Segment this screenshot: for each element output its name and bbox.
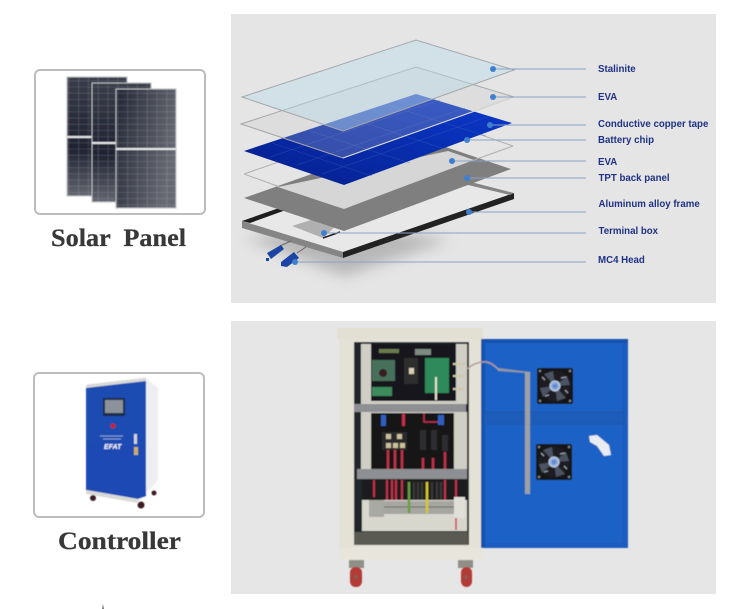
heading: Controller: Controller <box>58 528 181 555</box>
icon: cooling fan upper <box>537 368 573 404</box>
cabinet body <box>337 328 628 587</box>
icon: controller cabinet <box>86 378 158 508</box>
icon: controller cabinet: EFAT <box>104 444 122 451</box>
layer labels: EVA <box>598 157 617 168</box>
metal rail upper <box>354 404 466 412</box>
layer labels: EVA <box>598 92 617 103</box>
upper circuit plate <box>371 344 465 401</box>
door <box>481 339 628 548</box>
layer: EVA lower <box>244 131 513 209</box>
layer labels: Battery chip <box>598 135 654 146</box>
cabinet interior <box>354 342 469 545</box>
wire duct <box>467 362 530 494</box>
layer: stalinite <box>242 40 514 131</box>
layer labels <box>598 64 709 266</box>
layer labels: Terminal box <box>598 226 659 237</box>
middle breaker plate <box>371 413 454 469</box>
icon: solar panels <box>67 77 176 208</box>
layer: EVA upper <box>241 67 514 158</box>
leader lines and dots <box>295 69 586 262</box>
icon: cooling fan lower <box>536 444 572 480</box>
layer: conductive copper tape and battery chip <box>244 94 512 185</box>
layer: aluminum alloy frame <box>242 162 514 258</box>
layer: terminal box <box>292 217 340 238</box>
door latch <box>589 435 611 456</box>
layer labels: TPT back panel <box>598 173 670 184</box>
terminal strip <box>362 479 467 531</box>
layer: TPT back panel <box>244 137 511 231</box>
card: controller photo <box>34 373 204 517</box>
panel: controller interior photo <box>231 321 716 594</box>
cabinet legs and wheels <box>349 560 473 587</box>
layer labels: Conductive copper tape <box>598 119 709 130</box>
layer labels: MC4 Head <box>598 255 645 266</box>
icon: MC4 connectors <box>266 241 306 267</box>
frame shadow <box>245 225 450 276</box>
heading: Solar Panel: Solar Panel <box>51 225 186 252</box>
panel: solar panel layer diagram <box>231 14 716 303</box>
layer labels: Aluminum alloy frame <box>598 199 700 210</box>
metal rail lower <box>357 469 467 479</box>
card: solar panel photo <box>35 70 205 214</box>
layer labels: Stalinite <box>598 64 636 75</box>
